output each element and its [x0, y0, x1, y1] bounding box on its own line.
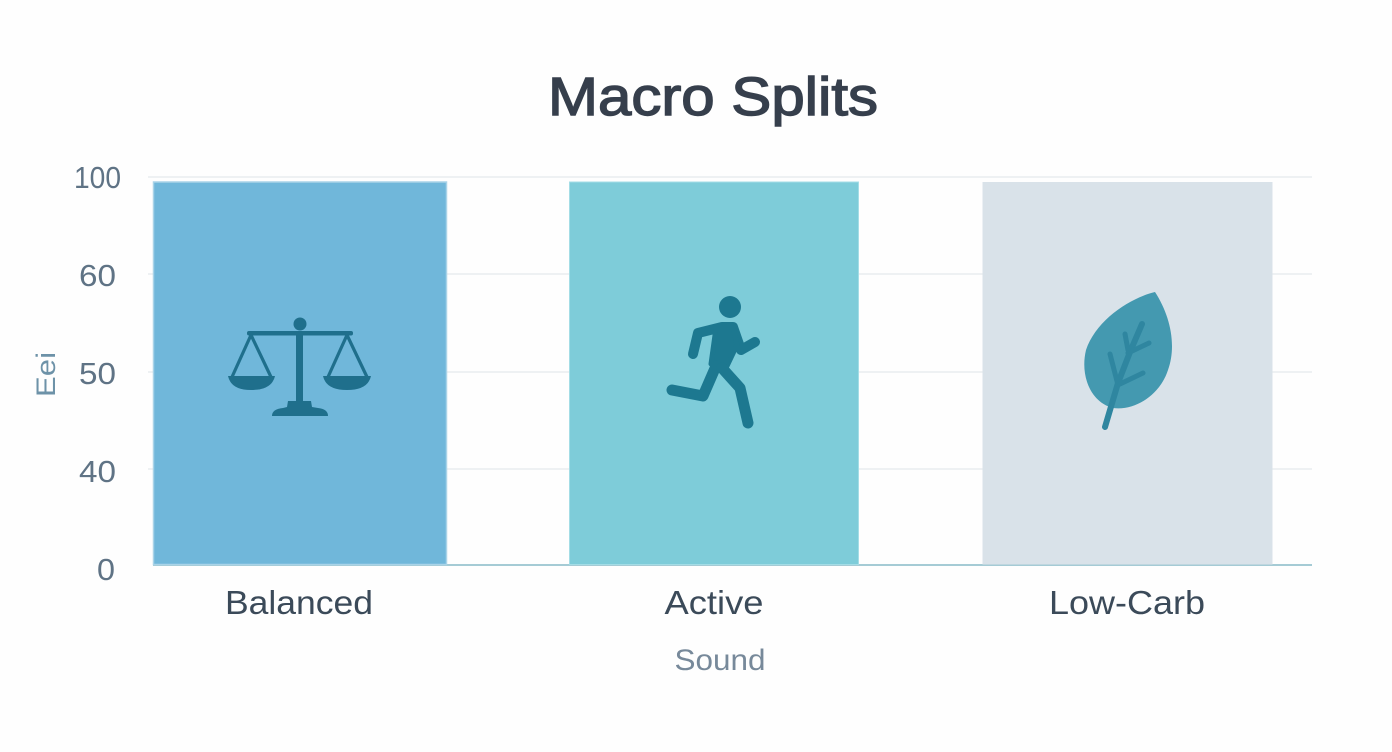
x-axis category labels: [225, 584, 1205, 621]
x-axis title: Sound: [674, 644, 766, 677]
y-axis title: Eei: [31, 352, 61, 397]
y-axis tick labels: 50: [79, 356, 116, 391]
x-axis category labels: Low-Carb: [1049, 584, 1205, 621]
icon: balance scale: [228, 318, 371, 416]
y-axis tick labels: 100: [74, 160, 121, 195]
x-axis category labels: Active: [664, 584, 764, 621]
icon: leaf: [1084, 292, 1172, 427]
title: Macro Splits: [548, 67, 878, 127]
bar: Active: [570, 182, 858, 564]
x-axis category labels: Balanced: [225, 584, 373, 621]
y-axis tick labels: [74, 160, 121, 587]
bar: Balanced: [154, 182, 446, 564]
x-axis line: [153, 564, 1312, 566]
bar: Low-Carb: [982, 182, 1272, 564]
y-axis tick labels: 60: [79, 258, 116, 293]
y-axis tick labels: 0: [97, 552, 115, 587]
icon: runner: [672, 296, 755, 423]
y-axis tick labels: 40: [79, 454, 116, 489]
